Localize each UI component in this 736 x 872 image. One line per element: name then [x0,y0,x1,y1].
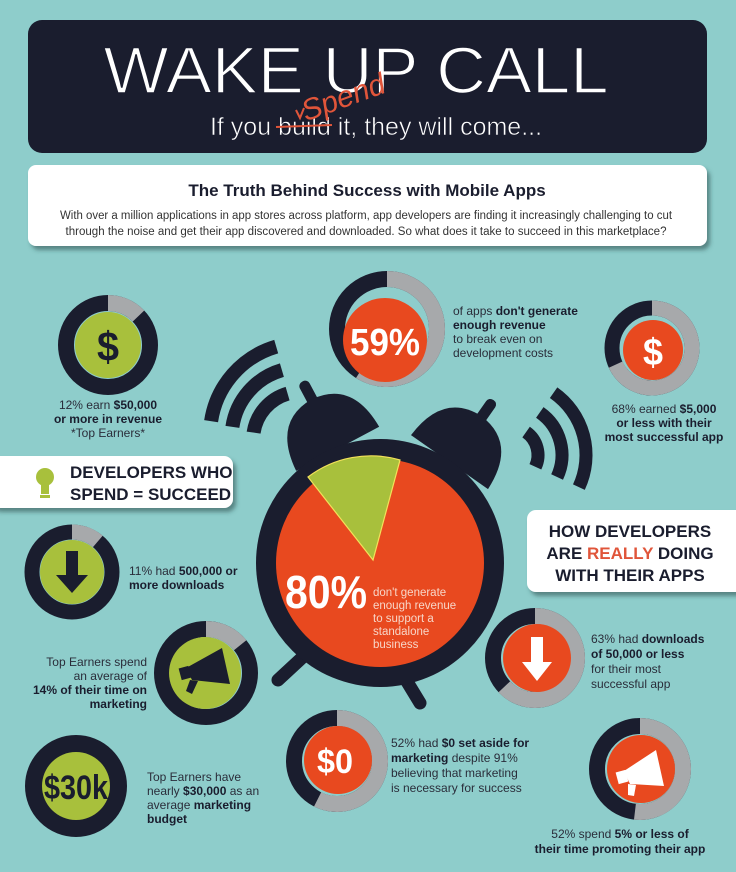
stat: 63% downloads: successful app [591,677,671,691]
stat: $30k budget: budget [147,812,187,826]
stat: 68%: or less with their [616,416,712,430]
stat: 12% top earners: 12% earn $50,000 [59,398,157,412]
stat: 68%: 68% earned $5,000 [612,402,717,416]
callout: how developers are really doing: ARE REALLY DOING [546,544,714,563]
title: WAKE UP CALL [104,33,608,107]
stat: 11% downloads: more downloads [129,578,225,592]
stat: 12% top earners: *Top Earners* [71,426,145,440]
stat: 68% [605,308,723,444]
stat: 12% top earners: $ [97,323,119,370]
stat: 52% promoting [535,726,705,856]
stat: $0 marketing: $0 [317,743,353,781]
clock: to support a [373,613,434,625]
clock [256,360,532,703]
handwritten correction [276,108,332,127]
stat: 63% downloads: 63% had downloads [591,632,705,646]
intro body: With over a million applications in app stores across platform, app developers are finding it increasingly challenging to cut [60,210,673,222]
stat: 68%: $ [643,332,663,374]
sound waves left [211,347,288,433]
pie wedge [308,456,400,560]
left bell [260,360,379,471]
sound waves right [526,393,586,487]
stat: 14% time on marketing: an average of [74,669,148,683]
stat: $30k budget: $30k [44,769,108,807]
subtitle: If you build it, they will come... [210,113,542,141]
spend word: Spend [297,67,391,128]
stat: 59%: 59% [350,322,420,364]
callout: how developers are really doing: WITH THEIR APPS [555,566,705,585]
callout: developers who spend: SPEND = SUCCEED [70,485,231,504]
stat: 59%: development costs [453,346,553,360]
icon: lightbulb [36,468,54,498]
stat: 59%: enough revenue [453,318,546,332]
clock: standalone [373,626,429,638]
stat: 59% [337,279,578,382]
stat: $0 marketing: believing that marketing [391,766,518,780]
stat: $0 marketing: 52% had $0 set aside for [391,736,529,750]
stat: 52% promoting: 52% spend 5% or less of [551,827,690,841]
stat: $30k budget: nearly $30,000 as an [147,784,259,798]
stat: $30k budget: Top Earners have [147,770,241,784]
clock: don't generate [373,587,446,599]
stat: 59%: to break even on [453,332,542,346]
right bell [411,373,532,489]
stat: 14% time on marketing: 14% of their time on [33,683,147,697]
stat: $0 marketing [294,718,529,804]
intro panel [28,165,707,246]
stat: 12% top earners: or more in revenue [54,412,162,426]
stat: 14% time on marketing: Top Earners spend [46,655,147,669]
stat: 63% downloads: for their most [591,662,662,676]
intro panel: through the noise and get their app discovered and downloaded. So what does it take to succeed in this marketplace? [66,226,666,238]
callout: developers who spend: DEVELOPERS WHO [70,463,232,482]
callout: how developers are really doing: HOW DEVELOPERS [549,522,711,541]
stat: 68%: most successful app [605,430,723,444]
clock: enough revenue [373,600,456,612]
stat: $30k budget [34,744,259,828]
header banner [28,20,707,153]
intro heading: The Truth Behind Success with Mobile Apps [188,181,546,200]
stat: 52% promoting: their time promoting their app [535,842,705,856]
callout: developers who spend [0,456,233,508]
stat: 14% time on marketing: marketing [90,697,147,711]
callout: how developers are really doing [527,510,736,592]
stat: 11% downloads: 11% had 500,000 or [129,564,238,578]
stat: $0 marketing: is necessary for success [391,781,522,795]
80% stat: 80% [285,566,367,618]
stat: $0 marketing: marketing despite 91% [391,751,518,765]
feet [278,655,420,703]
stat: $30k budget: average marketing [147,798,251,812]
stat: 63% downloads [493,616,705,700]
stat: 59%: of apps don't generate [453,304,578,318]
stat: 14% time on marketing [33,629,250,717]
stat: 12% top earners [54,303,162,440]
stat: 63% downloads: of 50,000 or less [591,647,685,661]
clock: business [373,639,419,651]
stat: 11% downloads [32,532,238,612]
